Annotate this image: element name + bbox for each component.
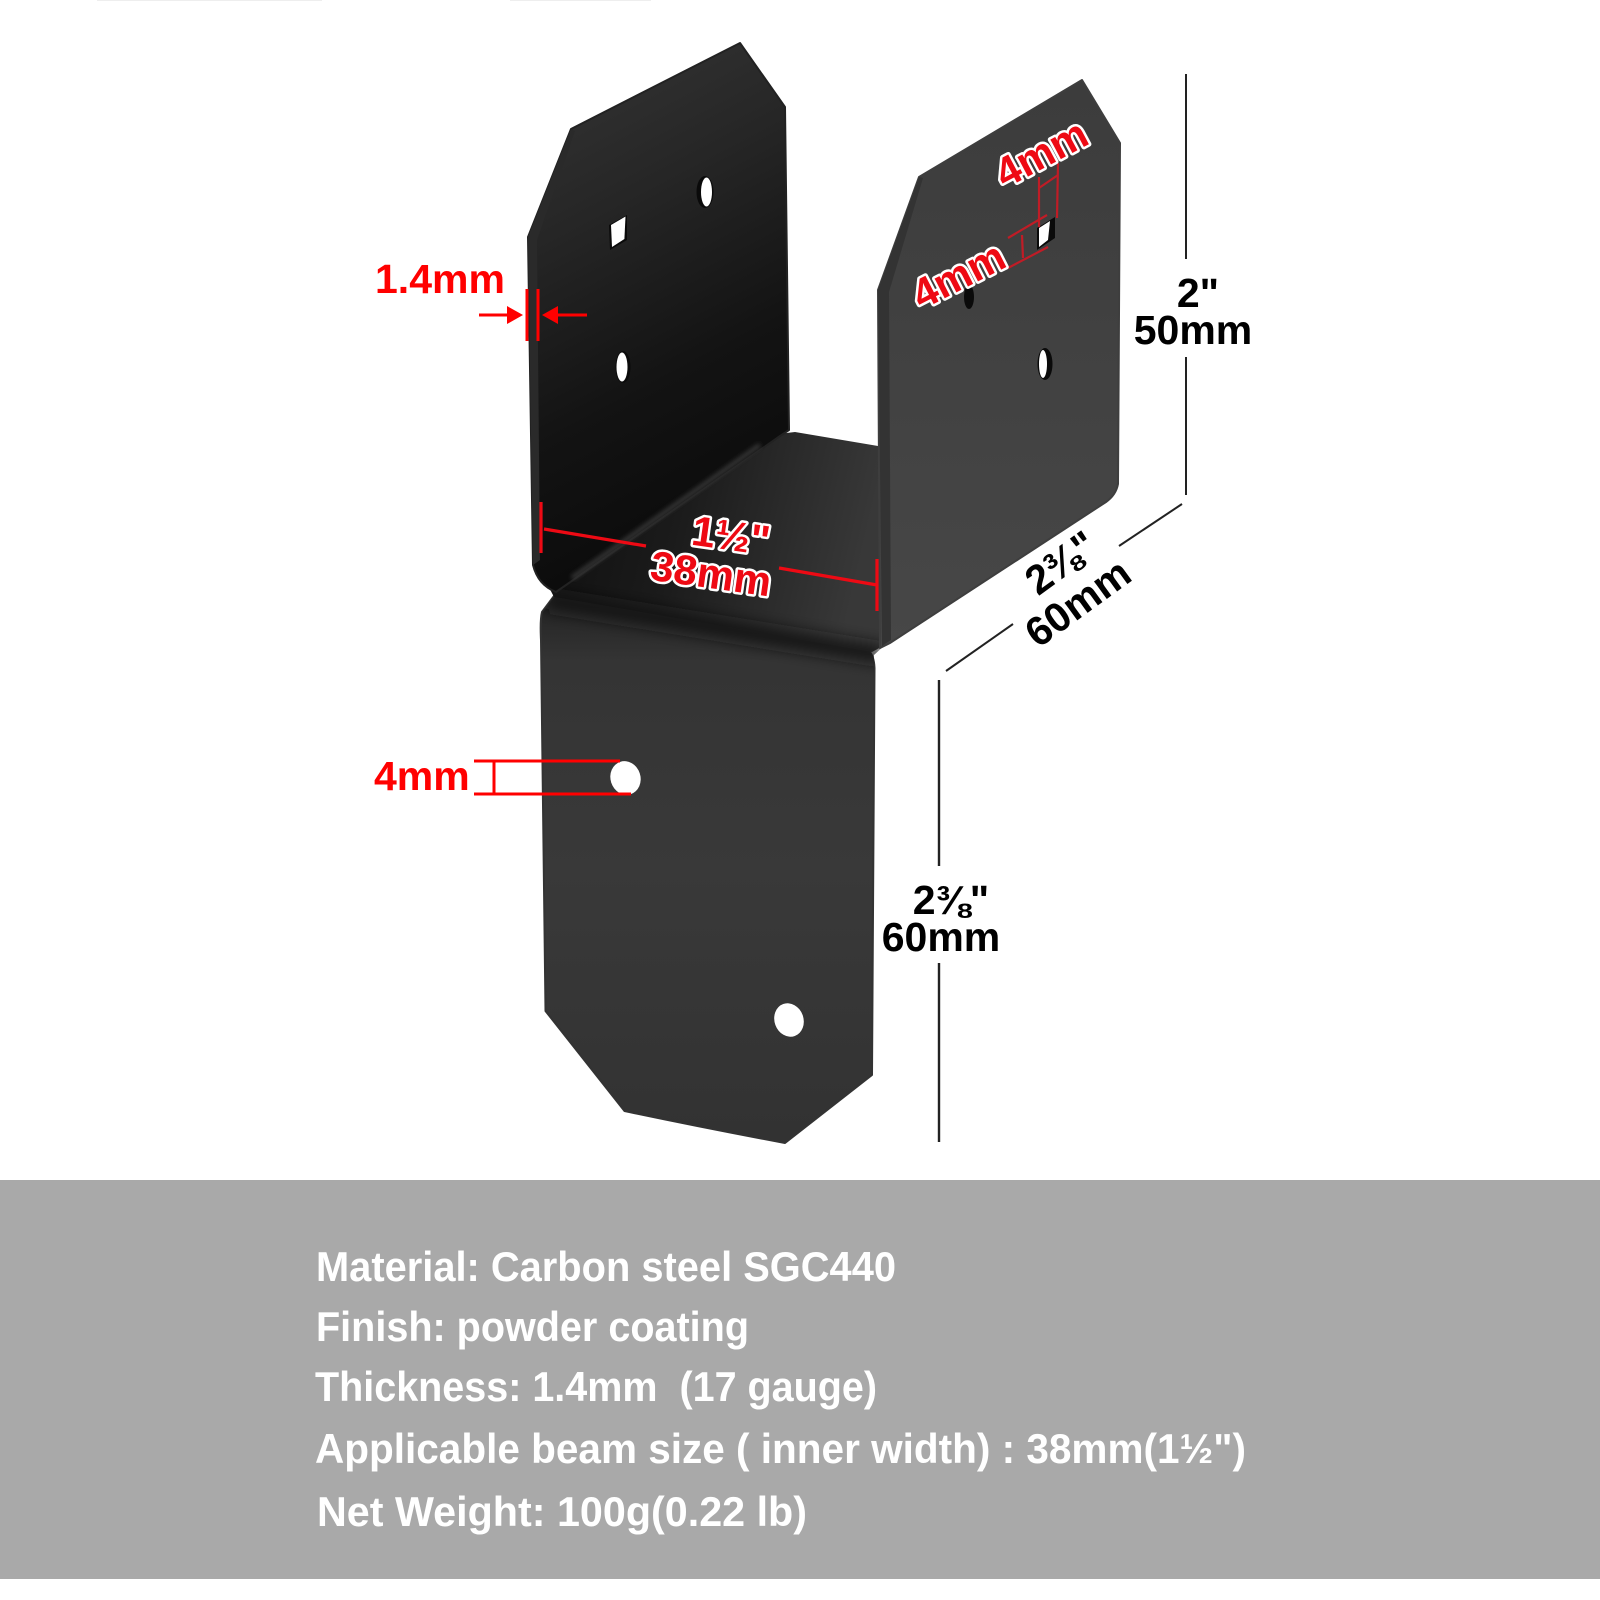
wall to floor highlight — [572, 445, 760, 578]
hole: left wall top round — [696, 176, 714, 208]
label: 2": 2" — [1177, 270, 1219, 316]
panel: specifications — [0, 1180, 1600, 1579]
bend shadow between floor and lower plate — [545, 600, 885, 655]
hole: left wall square — [609, 215, 627, 250]
spec: material: Material: Carbon steel SGC440 — [316, 1243, 896, 1290]
lower plate — [541, 596, 874, 1143]
dimension: thickness 1.4mm — [375, 256, 587, 341]
hole: left wall lower round — [616, 351, 630, 383]
label: 2⅜": 2⅜" — [913, 877, 989, 923]
label: 60mm: 60mm — [1016, 549, 1139, 656]
label: 2⅜": 2⅜" — [1016, 522, 1105, 604]
hole: lower plate bottom — [770, 999, 808, 1041]
spec: beam size: Applicable beam size ( inner width) : 38mm(1½") — [315, 1425, 1246, 1472]
dimension: lower hole 4mm — [374, 753, 631, 799]
dimension: lower plate 2⅜ inch 60mm — [882, 680, 1000, 1142]
label: 50mm: 50mm — [1134, 307, 1252, 353]
spec: thickness: Thickness: 1.4mm (17 gauge) — [315, 1363, 877, 1410]
hole: right wall square — [1037, 217, 1055, 250]
label: top 4mm: 4mm — [987, 109, 1096, 197]
hole: lower plate upper — [606, 757, 645, 799]
floor of the bracket — [540, 432, 885, 652]
label: 38mm: 38mm — [648, 542, 774, 605]
dimension: lower hole 4mm: 4mm — [374, 753, 470, 799]
left wall — [528, 43, 789, 592]
dimension: square hole 4mm — [904, 109, 1096, 318]
bracket product illustration — [528, 43, 1120, 1143]
dimension: inner width 1½ inch 38mm — [541, 502, 877, 611]
label: 60mm: 60mm — [882, 914, 1000, 960]
faint top edge marks — [97, 0, 651, 1]
dimension: thickness 1.4mm: 1.4mm — [375, 256, 505, 302]
hole: right wall lower round — [1038, 348, 1052, 380]
spec: net weight: Net Weight: 100g(0.22 lb) — [317, 1488, 807, 1535]
label: left 4mm: 4mm — [904, 232, 1013, 318]
spec: finish: Finish: powder coating — [316, 1303, 749, 1350]
dimension: depth 2⅜ inch 60mm — [946, 504, 1182, 671]
right wall — [878, 80, 1120, 648]
hole: right wall upper round — [964, 285, 974, 309]
label: 1½": 1½" — [689, 507, 773, 564]
dimension: height 2 inch 50mm — [1134, 74, 1252, 495]
